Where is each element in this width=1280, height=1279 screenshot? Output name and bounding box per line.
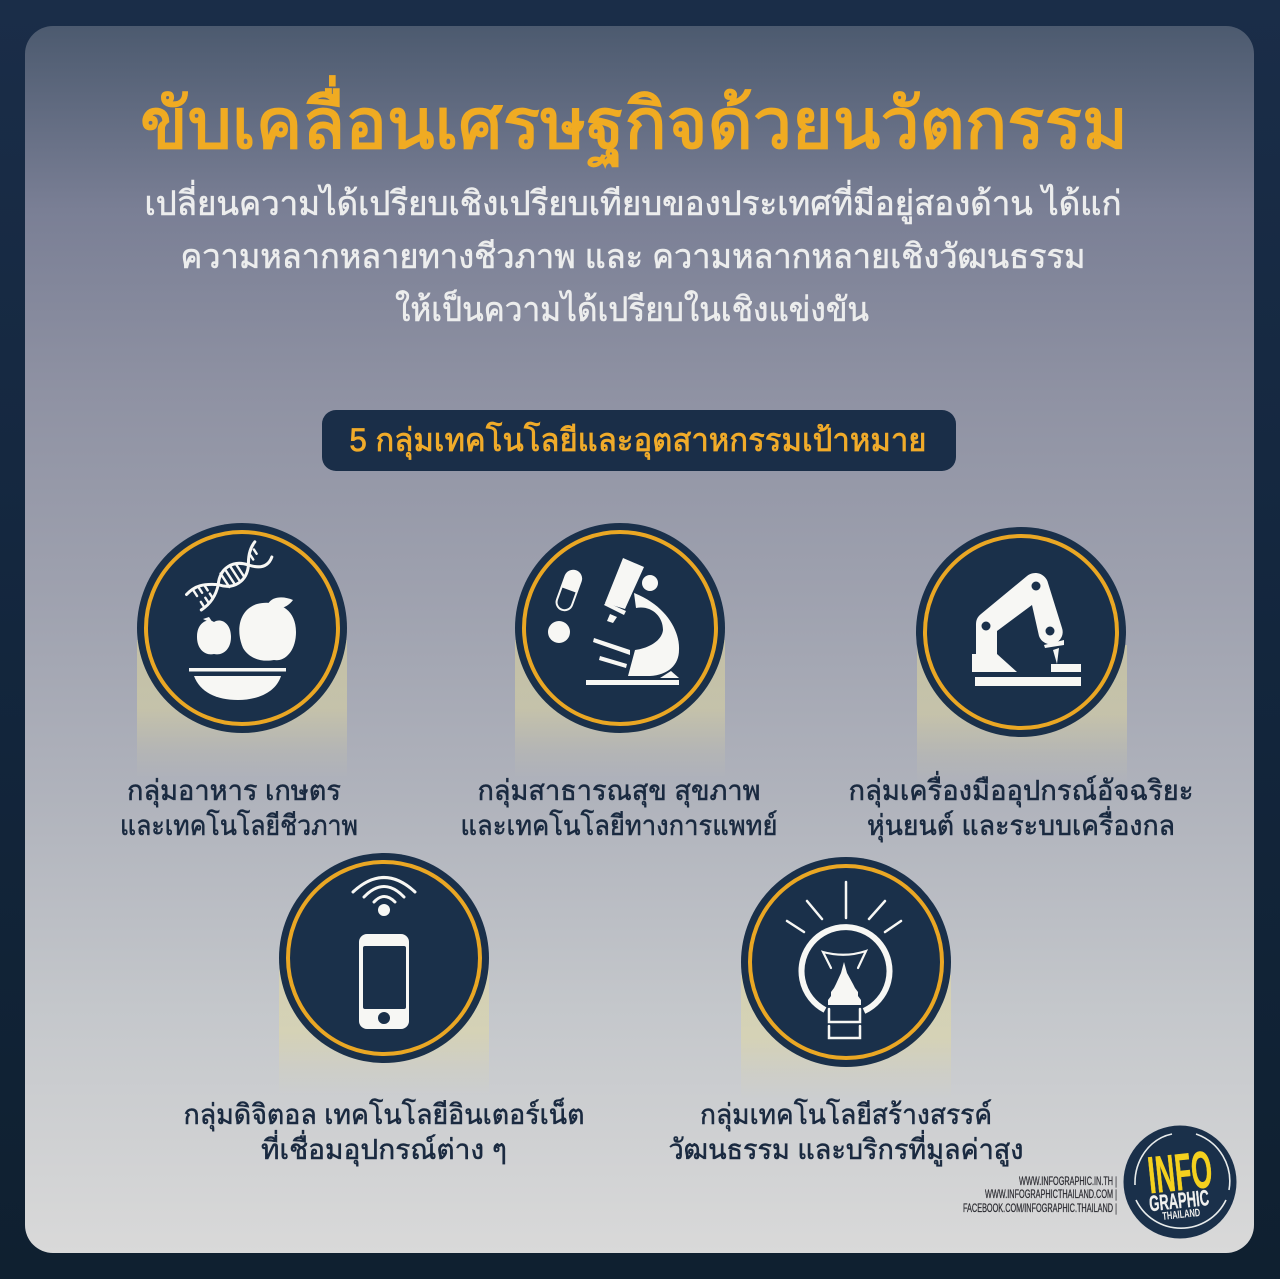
icon: small apple (197, 617, 231, 654)
label: digital and internet: ที่เชื่อมอุปกรณ์ต่าง ๆ (261, 1130, 507, 1167)
intro paragraph (144, 180, 1122, 329)
icon: smartphone (359, 934, 409, 1029)
label: smart devices and robotics: หุ่นยนต์ และระบบเครื่องกล (867, 806, 1175, 843)
label: smart devices and robotics (848, 771, 1194, 843)
logo: GRAPHIC (1148, 1185, 1210, 1216)
icon: pill (548, 621, 570, 643)
icon: robot arm (972, 573, 1081, 686)
label: food and biotech: กลุ่มอาหาร เกษตร (127, 775, 341, 808)
icon: dna (183, 539, 275, 612)
intro paragraph: ให้เป็นความได้เปรียบในเชิงแข่งขัน (395, 289, 869, 329)
group: public health and medical (515, 523, 725, 778)
label: public health and medical: กลุ่มสาธารณสุข สุขภาพ (478, 775, 760, 808)
section heading pill: 5 กลุ่มเทคโนโลยีและอุตสาหกรรมเป้าหมาย (350, 422, 926, 460)
logo: INFO (1145, 1141, 1215, 1205)
label: food and biotech: และเทคโนโลยีชีวภาพ (120, 809, 358, 841)
label: creative and culture (668, 1098, 1024, 1167)
icon: capsule (554, 568, 583, 612)
icon: microscope (586, 558, 679, 685)
logo (1124, 1126, 1236, 1238)
icon: large apple (239, 597, 296, 661)
icon: bowl (189, 668, 286, 700)
footer credits (963, 1174, 1117, 1215)
group: digital and internet (279, 853, 489, 1095)
label: public health and medical: และเทคโนโลยีทางการแพทย์ (460, 809, 778, 841)
icon: light bulb (787, 882, 901, 1038)
label: creative and culture: กลุ่มเทคโนโลยีสร้างสรรค์ (700, 1098, 992, 1132)
footer credits: FACEBOOK.COM/INFOGRAPHIC.THAILAND | (963, 1201, 1117, 1215)
group: food and biotech (137, 523, 347, 778)
label: food and biotech (120, 775, 358, 841)
group: smart devices and robotics (916, 527, 1127, 783)
label: creative and culture: วัฒนธรรม และบริกรที่มูลค่าสูง (668, 1130, 1024, 1167)
label: digital and internet (184, 1097, 584, 1167)
intro paragraph: เปลี่ยนความได้เปรียบเชิงเปรียบเทียบของประเทศที่มีอยู่สองด้าน ได้แก่ (144, 180, 1122, 224)
intro paragraph: ความหลากหลายทางชีวภาพ และ ความหลากหลายเชิงวัฒนธรรม (180, 238, 1086, 276)
footer credits: WWW.INFOGRAPHICTHAILAND.COM | (985, 1187, 1117, 1201)
title: ขับเคลื่อนเศรษฐกิจด้วยนวัตกรรม (140, 76, 1128, 166)
section heading pill (322, 410, 956, 471)
footer credits: WWW.INFOGRAPHIC.IN.TH | (1019, 1174, 1117, 1188)
icon: wifi (353, 878, 415, 916)
logo: THAILAND (1162, 1207, 1201, 1223)
group: creative and culture (741, 857, 951, 1100)
label: smart devices and robotics: กลุ่มเครื่องมืออุปกรณ์อัจฉริยะ (848, 771, 1194, 808)
label: digital and internet: กลุ่มดิจิตอล เทคโนโลยีอินเตอร์เน็ต (184, 1097, 584, 1132)
label: public health and medical (460, 775, 778, 841)
